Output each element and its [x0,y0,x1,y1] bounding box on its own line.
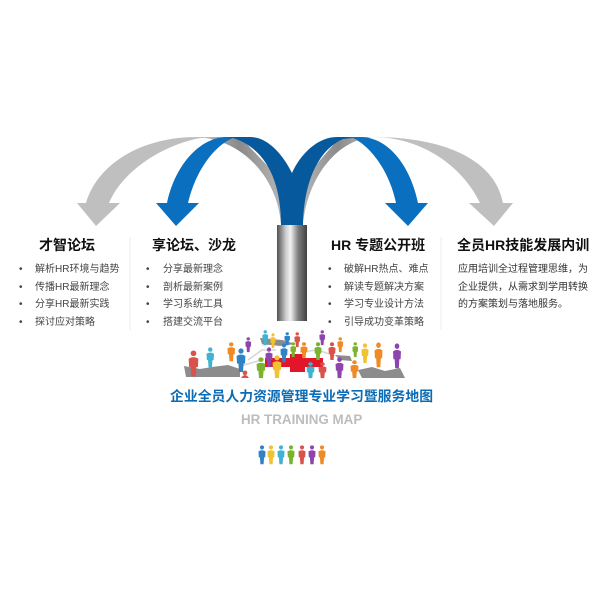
gray puzzle pieces [184,338,405,378]
heading: 享论坛、沙龙 [152,237,236,253]
bullet list: • [328,317,332,328]
heading: HR 专题公开班 [331,237,425,253]
column: 享论坛、沙龙 [146,237,236,328]
bullet list [19,262,119,328]
bullet list: 分享最新理念 [163,262,223,275]
light puzzle outlines [240,343,335,366]
description [458,262,588,310]
bullet list: • [146,317,150,328]
bullet list: 解读专题解决方案 [344,280,424,293]
gray ribbon left [197,137,281,225]
bullet list: • [19,282,23,293]
bullet list: 分享HR最新实践 [35,297,109,310]
bullet list: 搭建交流平台 [163,315,223,328]
bullet list: 学习专业设计方法 [344,297,424,310]
ribbon: dark blue centre [227,137,360,225]
column: 才智论坛 [19,237,119,328]
stem: steel cylinder [277,225,307,321]
heading: 全员HR技能发展内训 [457,237,589,253]
gray ribbon right [303,137,373,225]
bullet list: • [146,282,150,293]
bullet list: 引导成功变革策略 [344,315,424,328]
bullet list: 解析HR环境与趋势 [35,262,119,275]
map: puzzle with people [184,330,405,378]
bullet list: • [328,264,332,275]
bullet list: • [19,317,23,328]
bullet list: • [19,299,23,310]
column: HR 专题公开班 [328,237,428,328]
bullet list: 破解HR热点、难点 [344,262,428,275]
arrow: gray left [77,137,225,226]
bullet list: 传播HR最新理念 [35,280,109,293]
bullet list: 学习系统工具 [163,297,223,310]
heading: 才智论坛 [39,237,95,253]
arrow: blue left [156,137,240,226]
subtitle: English: HR TRAINING MAP [241,412,362,427]
description: 企业提供，从需求到学用转换 [458,280,588,293]
bullet list: • [328,282,332,293]
bullet list: • [146,264,150,275]
bullet list [146,262,223,328]
bullet list: • [146,299,150,310]
bullet list: • [19,264,23,275]
bullet list [328,262,428,328]
column: 全员HR技能发展内训 [457,237,589,310]
bullet list: 探讨应对策略 [35,315,95,328]
arrow: gray right [345,137,513,226]
people row [258,445,326,464]
bullet list: 剖析最新案例 [163,280,223,293]
title: Chinese: 企业全员人力资源管理专业学习暨服务地图 [170,388,433,404]
red puzzle piece [265,354,323,372]
arrow: blue right [345,137,428,226]
description: 应用培训全过程管理思维，为 [458,262,588,275]
bullet list: • [328,299,332,310]
divider [130,237,441,330]
people [189,330,401,378]
description: 的方案策划与落地服务。 [458,297,568,310]
